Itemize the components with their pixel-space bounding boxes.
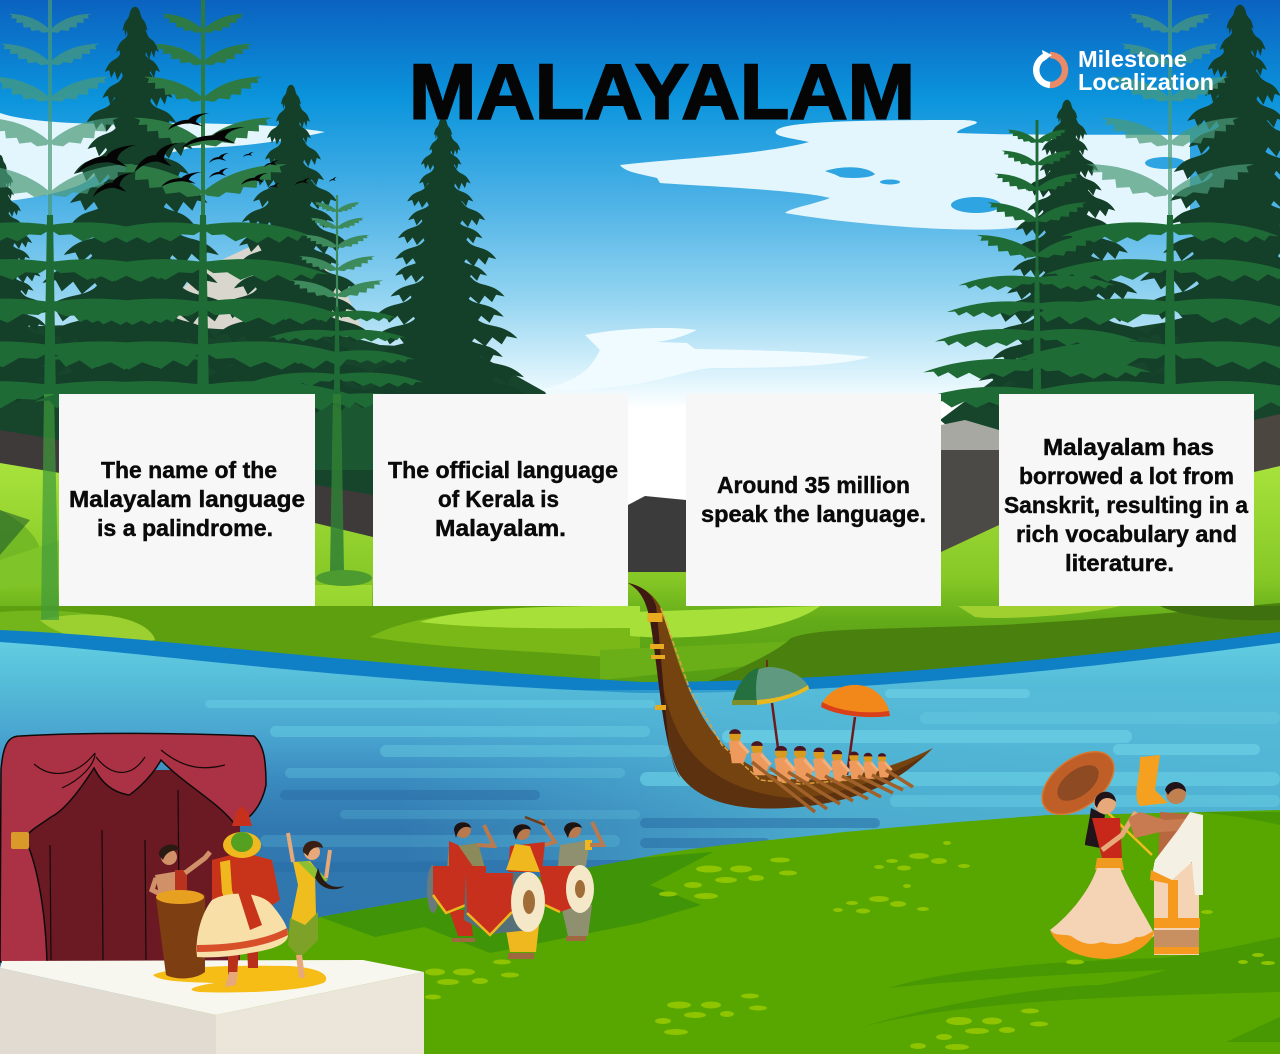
birds	[77, 113, 337, 197]
forest mass right	[940, 300, 1280, 470]
card: palindrome fact: is a palindrome.	[97, 515, 273, 541]
green umbrella	[732, 660, 809, 748]
curtain backdrop	[10, 770, 240, 965]
boat hull shadow	[664, 690, 925, 808]
female dancer	[288, 833, 345, 978]
card: speakers fact: Around 35 million	[717, 472, 910, 498]
card: Sanskrit fact: literature.	[1065, 550, 1174, 576]
fern tree right	[914, 120, 1160, 410]
drummer middle	[505, 817, 555, 959]
fern tree left	[0, 0, 221, 620]
logo: Milestone Localization	[1036, 46, 1214, 95]
orange umbrella	[821, 685, 890, 775]
river	[0, 630, 1280, 1054]
rowers	[729, 729, 892, 782]
card: official language fact: of Kerala is	[438, 486, 559, 512]
prow dark stripe	[628, 583, 680, 778]
card: Sanskrit fact: Sanskrit, resulting in a	[1004, 492, 1248, 518]
kathakali dancer	[197, 806, 288, 987]
curtain folds	[34, 750, 225, 960]
curtain drape	[0, 733, 266, 962]
title: MALAYALAM	[409, 48, 915, 136]
chenda drummer	[152, 845, 210, 978]
far snowy mountain	[140, 228, 365, 335]
cloud holes	[825, 157, 1185, 213]
umbrella	[1031, 739, 1152, 855]
drum middle	[464, 872, 545, 935]
stage platform	[0, 960, 424, 1054]
man	[1128, 782, 1203, 955]
snake boat	[628, 583, 933, 812]
meadow light and dark hills	[0, 510, 1280, 684]
prow pattern	[661, 608, 850, 784]
drummer right	[558, 822, 603, 941]
card: Sanskrit fact: borrowed a lot from	[1019, 463, 1234, 489]
card: Sanskrit fact: Malayalam has	[1043, 434, 1214, 460]
fern tree far right	[999, 0, 1280, 414]
logo icon	[1036, 50, 1065, 85]
drum left	[427, 865, 486, 913]
horn	[1136, 755, 1168, 806]
woman	[1050, 792, 1155, 959]
grass patches	[425, 841, 1275, 1050]
card: Sanskrit fact: rich vocabulary and	[1016, 521, 1237, 547]
fern tree centre left	[32, 0, 374, 414]
card: palindrome fact: The name of the	[101, 457, 277, 483]
card: official language fact	[373, 394, 628, 606]
logo wordmark: Localization	[1078, 69, 1214, 95]
mountains	[628, 414, 1280, 574]
drum right	[539, 865, 594, 913]
boat hull	[628, 583, 933, 808]
stage yellow splash	[153, 966, 326, 993]
card: palindrome fact: Malayalam language	[69, 486, 305, 512]
foreground grass	[0, 810, 1280, 1054]
fern tree by mountain	[243, 195, 431, 586]
card: official language fact: The official language	[388, 457, 618, 483]
drummer left	[447, 822, 494, 942]
forest mass left	[0, 325, 560, 540]
logo wordmark	[1078, 46, 1214, 95]
oars	[752, 762, 913, 812]
conifer trees	[0, 5, 1280, 413]
prow gold bands	[648, 613, 666, 710]
card: official language fact: Malayalam.	[435, 515, 566, 541]
dhol drummers	[427, 817, 603, 959]
card: Sanskrit fact	[999, 394, 1254, 606]
logo wordmark: Milestone	[1078, 46, 1187, 72]
meadow	[0, 463, 1280, 720]
stage curtain	[0, 733, 266, 965]
clouds	[0, 113, 1190, 391]
card: palindrome fact	[59, 394, 315, 606]
card: speakers fact: speak the language.	[701, 501, 926, 527]
couple with umbrella and horn	[1031, 739, 1203, 959]
curtain tieback	[11, 832, 29, 849]
stage performers	[152, 806, 345, 987]
sky	[0, 0, 1280, 470]
mottled forest floor	[0, 342, 373, 537]
card: speakers fact	[686, 394, 941, 606]
